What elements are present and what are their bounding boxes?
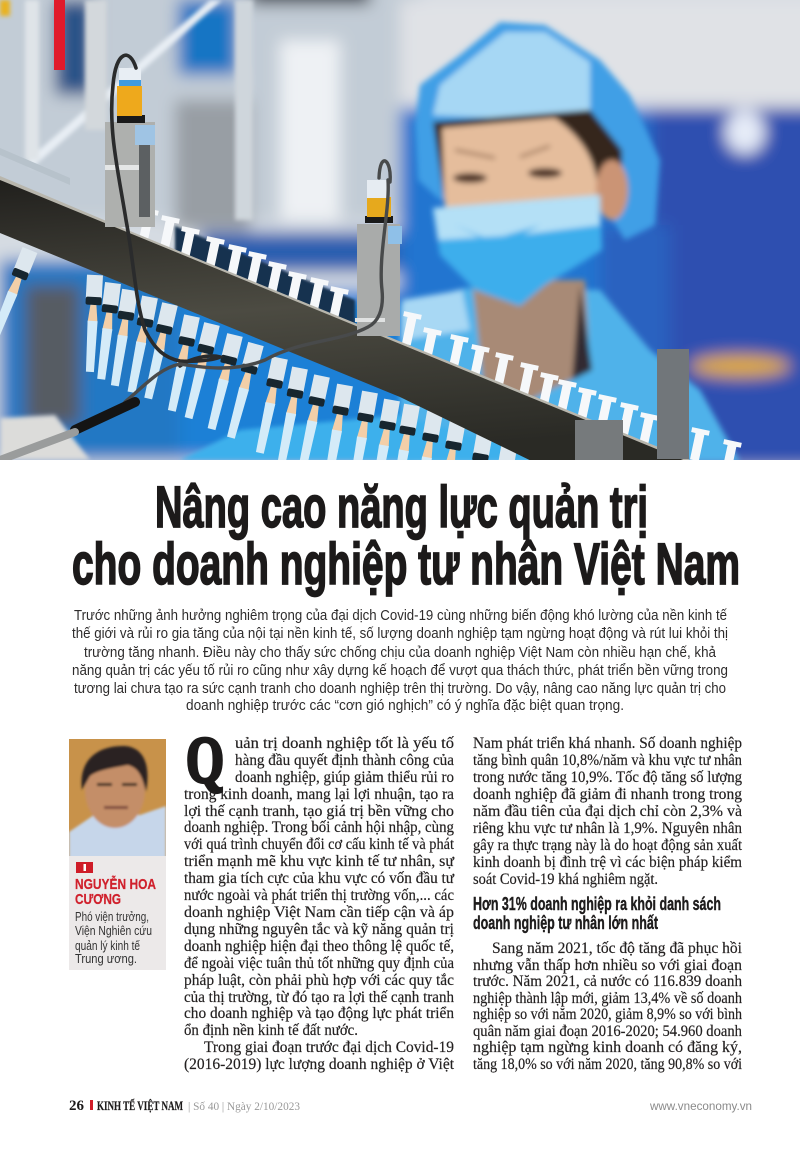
article column 1: doanh nghiệp Việt Nam cần tiếp cận và áp	[184, 904, 454, 921]
article column 2, upper text: tăng bình quân 10,8%/năm và khu vực tư nhân	[473, 752, 742, 769]
article column 2, upper text: riêng khu vực tư nhân là 1,9%. Nguyên nhân	[473, 820, 742, 837]
article column 1: Trong giai đoạn trước đại dịch Covid-19	[204, 1039, 454, 1056]
article column 1: để ngoài việc tuân thủ tốt những quy định của	[184, 955, 454, 972]
author name	[75, 876, 156, 908]
blurred factory background	[0, 0, 800, 480]
cap	[415, 22, 660, 240]
article column 1: doanh nghiệp. Trong bối cảnh hội nhập, cùng	[184, 819, 454, 836]
article column 2, lower text: tăng 18,0% so với năm 2020, tăng 90,8% so với	[473, 1056, 743, 1073]
article column 1: nước ngoài và phát triển thị trường vốn,... các	[184, 887, 454, 904]
magazine name: KINH TẾ VIỆT NAM	[97, 1098, 183, 1113]
article column 2, upper text: gây ra thực trạng này là do hoạt động sản xuất	[473, 837, 743, 854]
author role: Viện Nghiên cứu	[75, 924, 152, 938]
author role: Trung ương.	[75, 952, 137, 966]
card background	[69, 856, 166, 970]
article column 1: doanh nghiệp hiện đại theo thông lệ quốc tế,	[184, 938, 454, 955]
footer	[69, 1098, 752, 1114]
article column 2, upper text: soát Covid-19 khá nghiêm ngặt.	[473, 871, 658, 888]
sensor 2	[355, 180, 402, 336]
article column 2, upper text	[473, 735, 743, 888]
white comb on rail	[0, 148, 742, 474]
face	[442, 118, 598, 210]
article column 2, lower text: nghiệp tạm ngừng kinh doanh có đăng ký,	[473, 1039, 742, 1056]
red accent bar	[54, 0, 65, 70]
author role	[75, 910, 152, 966]
title	[72, 475, 740, 597]
issue and date: | Số 40 | Ngày 2/10/2023	[188, 1099, 300, 1113]
article column 2, lower text	[473, 940, 743, 1073]
intro paragraph: doanh nghiệp trước các “cơn gió nghịch” có ý nghĩa đặc biệt quan trọng.	[186, 697, 624, 714]
article column 2, upper text: doanh nghiệp đã giảm đi nhanh trong trong	[473, 786, 742, 803]
article column 1: dụng những nguyên tắc và kỹ năng quản trị	[184, 921, 455, 938]
article column 1: doanh nghiệp, giúp giảm thiểu rủi ro	[235, 769, 454, 786]
red marker	[90, 1100, 93, 1110]
article column 2, upper text: năm đầu tiên của đại dịch chỉ còn 2,3% và	[473, 803, 742, 820]
author name: NGUYỄN HOA	[75, 876, 156, 893]
hair	[433, 110, 622, 205]
article column 1: cho doanh nghiệp và tạo động lực phát triển	[184, 1005, 454, 1022]
worker	[400, 22, 740, 462]
article column 1: pháp luật, còn phải phù hợp với các quy tắc	[184, 972, 454, 989]
article column 1: tham gia tích cực của khu vực có vốn đầu tư	[184, 870, 454, 887]
author role: Phó viện trưởng,	[75, 910, 149, 924]
dark strip behind comb	[175, 226, 355, 330]
article column 2, upper text: Nam phát triển khá nhanh. Số doanh nghiệp	[473, 735, 742, 752]
uniform	[400, 288, 740, 462]
intro paragraph: thế giới và rủi ro gia tăng của nội tại nền kinh tế, số lượng doanh nghiệp tạm ngừng hoạt động và rút lui khỏi thị	[72, 625, 728, 642]
cables	[0, 55, 390, 460]
website: www.vneconomy.vn	[649, 1099, 752, 1113]
article column 1: trong kinh doanh, mang lại lợi nhuận, tạo ra	[184, 786, 454, 803]
sensor 1	[105, 68, 155, 227]
drop cap Q: Q	[186, 724, 224, 797]
article column 1: uản trị doanh nghiệp tốt là yếu tố	[235, 735, 454, 752]
mask	[432, 195, 602, 306]
intro paragraph	[72, 607, 728, 714]
section subheading	[473, 894, 721, 933]
article column 2, lower text: Sang năm 2021, tốc độ tăng đã phục hồi	[492, 940, 743, 957]
article column 1: của thị trường, từ đó tạo ra lợi thế cạnh tranh	[184, 989, 454, 1006]
article column 2, upper text: kinh doanh bị đình trệ vì các biện pháp kiểm	[473, 854, 743, 871]
article column 2, lower text: nhưng vẫn thấp hơn nhiều so với giai đoạn	[473, 957, 742, 974]
article column 1: lợi thế cạnh tranh, tạo giá trị bền vững cho	[184, 803, 454, 820]
intro paragraph: năng quản trị các yếu tố rủi ro cũng như xây dựng kế hoạch để vượt qua thách thức, phát triển bền vững trong	[72, 662, 728, 679]
syringes	[0, 247, 516, 460]
article column 2, lower text: nghiệp so với năm 2020, giảm 8,9% so với bình	[473, 1006, 742, 1023]
article column 2, lower text: trước. Năm 2021, cả nước có 116.839 doanh	[473, 973, 742, 990]
author role: quản lý kinh tế	[75, 939, 140, 953]
article column 1: ổn định nền kinh tế đất nước.	[184, 1022, 358, 1039]
article column 1: hàng đầu quyết định thành công của	[235, 752, 454, 769]
metal post and block	[575, 349, 689, 462]
article column 1: triển mạnh mẽ khu vực kinh tế tư nhân, sự	[184, 853, 454, 870]
intro paragraph: trường tăng nhanh. Điều này cho thấy sức chống chịu của doanh nghiệp Việt Nam còn nhiều hạn chế, khả	[84, 644, 717, 661]
intro paragraph: tương lai chưa tạo ra sức cạnh tranh cho doanh nghiệp trên thị trường. Do vậy, nâng cao năng lực quản trị cho	[74, 680, 726, 697]
intro paragraph: Trước những ảnh hưởng nghiêm trọng của đại dịch Covid-19 cùng những biến động khó lường của nền kinh tế	[74, 607, 728, 624]
author card	[69, 739, 166, 970]
neck	[472, 280, 590, 400]
page number: 26	[69, 1098, 84, 1114]
article column 1	[184, 735, 455, 1073]
bottom-left sleeve	[0, 415, 560, 460]
rail	[0, 178, 710, 470]
photo: worker in blue mask beside syringe production line	[0, 0, 800, 460]
red person icon	[76, 862, 93, 873]
diagonal bars behind	[0, 0, 253, 220]
article column 2, lower text: quân năm giai đoạn 2016-2020; 54.960 doanh	[473, 1023, 742, 1040]
article column 1: với quá trình chuyển đổi cơ cấu kinh tế và phát	[184, 836, 455, 853]
article column 1: (2016-2019) lực lượng doanh nghiệp ở Việt	[184, 1056, 455, 1073]
article column 2, upper text: trong nước tăng 10,9%. Tốc độ tăng số lượng	[473, 769, 742, 786]
author portrait	[69, 739, 166, 860]
author name: CƯƠNG	[75, 891, 121, 908]
section subheading: doanh nghiệp tư nhân lớn nhất	[473, 913, 658, 933]
article column 2, lower text: nghiệp thành lập mới, giảm 13,4% về số doanh	[473, 990, 742, 1007]
